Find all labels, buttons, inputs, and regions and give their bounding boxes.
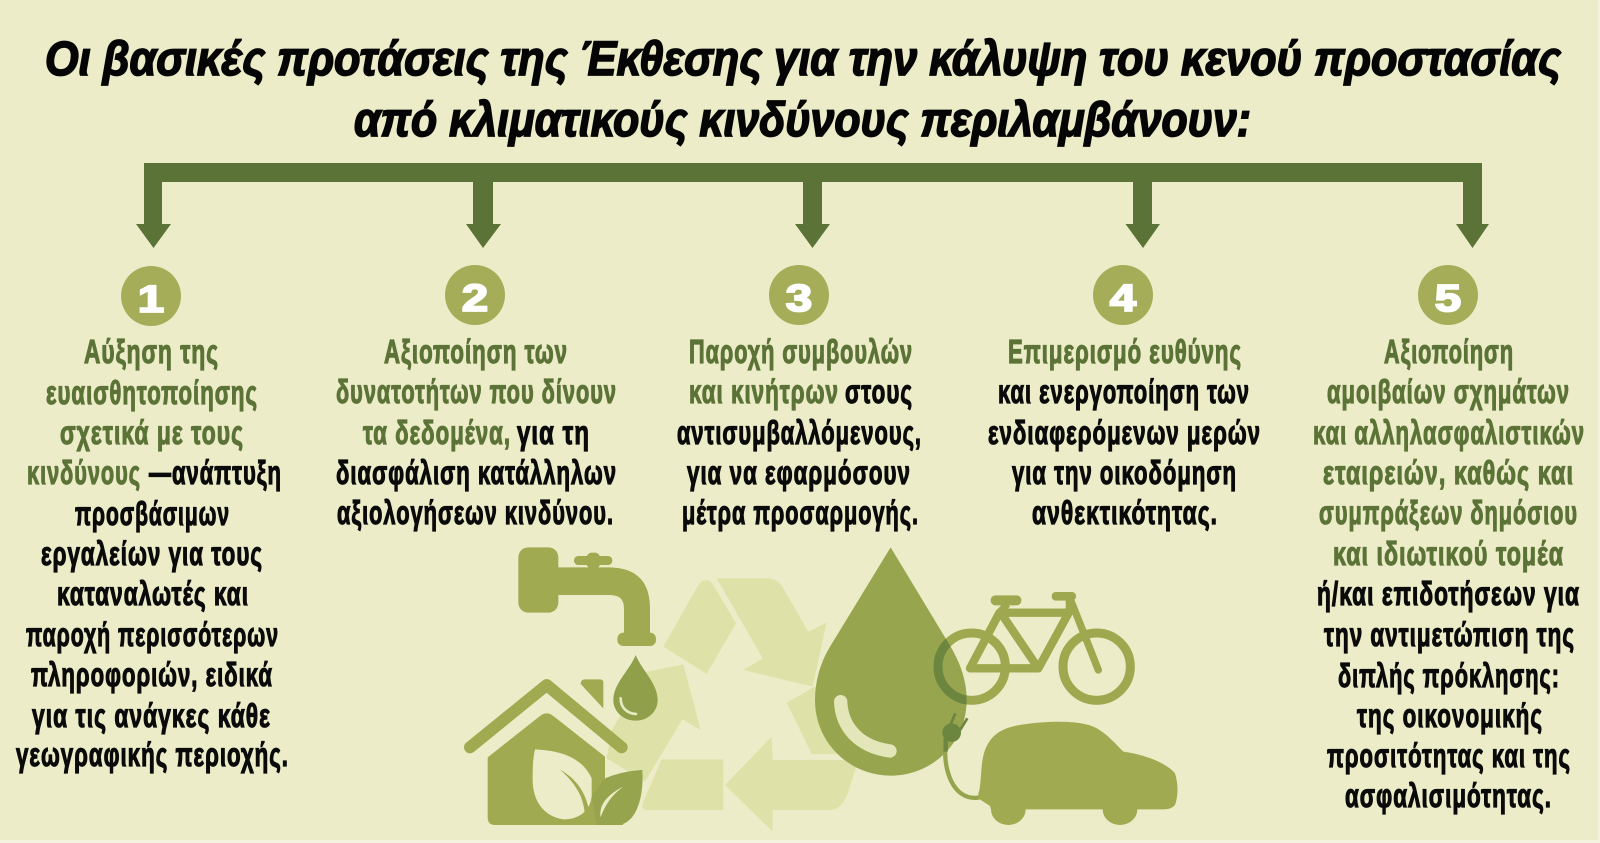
icon: bicycle	[938, 592, 1130, 700]
heading 1	[27, 333, 258, 491]
body text 2: αξιολογήσεων κινδύνου.	[337, 494, 614, 531]
title	[45, 33, 1561, 147]
icon: electric car with plug	[942, 713, 1177, 825]
body text 1: γεωγραφικής περιοχής.	[16, 736, 289, 773]
body text 3: μέτρα προσαρμογής.	[682, 494, 919, 531]
column 5	[1313, 265, 1585, 814]
arrow bracket connecting title to five items	[136, 163, 1489, 248]
body text 4: ανθεκτικότητας.	[1032, 494, 1218, 531]
number badge 1	[121, 266, 181, 326]
body text 1: προσβάσιμων	[75, 495, 230, 532]
heading 3: και κινήτρων	[689, 373, 839, 410]
icon: house with leaves	[470, 679, 643, 825]
heading 4: Επιμερισμό ευθύνης	[1008, 333, 1242, 370]
body text 4: για την οικοδόμηση	[1012, 454, 1237, 491]
body text 2	[336, 414, 617, 531]
heading 5: Αξιοποίηση	[1384, 333, 1514, 370]
body text 3	[677, 373, 922, 531]
heading 1: κινδύνους	[27, 454, 141, 491]
icon: faucet	[518, 547, 656, 646]
heading 2: τα δεδομένα,	[363, 414, 511, 451]
heading 3	[689, 333, 913, 410]
body text 3: για να εφαρμόσουν	[687, 454, 911, 491]
number badge 2	[445, 265, 505, 325]
column 1	[16, 266, 289, 773]
body text 3: στους	[845, 373, 913, 410]
number badge 1: 1	[138, 278, 164, 321]
number badge 4	[1093, 265, 1153, 325]
body text 1: καταναλωτές και	[57, 575, 249, 612]
icon: large water drop	[815, 547, 967, 776]
column 3	[677, 265, 922, 531]
heading 3: Παροχή συμβουλών	[689, 333, 913, 370]
body text 3: αντισυμβαλλόμενους,	[677, 414, 922, 451]
heading 2: Αξιοποίηση των	[384, 333, 568, 370]
body text 1: —ανάπτυξη	[149, 454, 282, 491]
number badge 2: 2	[462, 277, 488, 320]
illustration: recycling arrows	[607, 578, 867, 832]
column 2	[336, 265, 617, 531]
body text 2: για τη	[517, 414, 590, 451]
number badge 5	[1418, 265, 1478, 325]
heading 1: σχετικά με τους	[60, 414, 244, 451]
body text 2: διασφάλιση κατάλληλων	[336, 454, 617, 491]
number badge 3: 3	[786, 277, 812, 320]
body text 1: εργαλείων για τους	[41, 535, 263, 572]
body text 1: παροχή περισσότερων	[26, 616, 279, 653]
body text 4	[988, 373, 1261, 531]
body text 4: ενδιαφερόμενων μερών	[988, 414, 1261, 451]
number badge 5: 5	[1435, 277, 1461, 320]
heading 1: Αύξηση της	[84, 333, 219, 370]
number badge 3	[769, 265, 829, 325]
icon: small water drop	[613, 655, 658, 721]
heading 5	[1313, 333, 1585, 572]
heading 2: δυνατοτήτων που δίνουν	[336, 373, 617, 410]
column 4	[988, 265, 1261, 531]
body text 5	[1317, 575, 1580, 814]
heading 1: ευαισθητοποίησης	[46, 374, 258, 411]
body text 1	[16, 454, 289, 773]
body text 1: για τις ανάγκες κάθε	[32, 697, 271, 734]
body text 4: και ενεργοποίηση των	[998, 373, 1250, 410]
heading 2	[336, 333, 617, 451]
body text 1: πληροφοριών, ειδικά	[31, 656, 273, 693]
number badge 4: 4	[1110, 277, 1136, 320]
title: από κλιματικούς κινδύνους περιλαμβάνουν:	[354, 94, 1251, 147]
